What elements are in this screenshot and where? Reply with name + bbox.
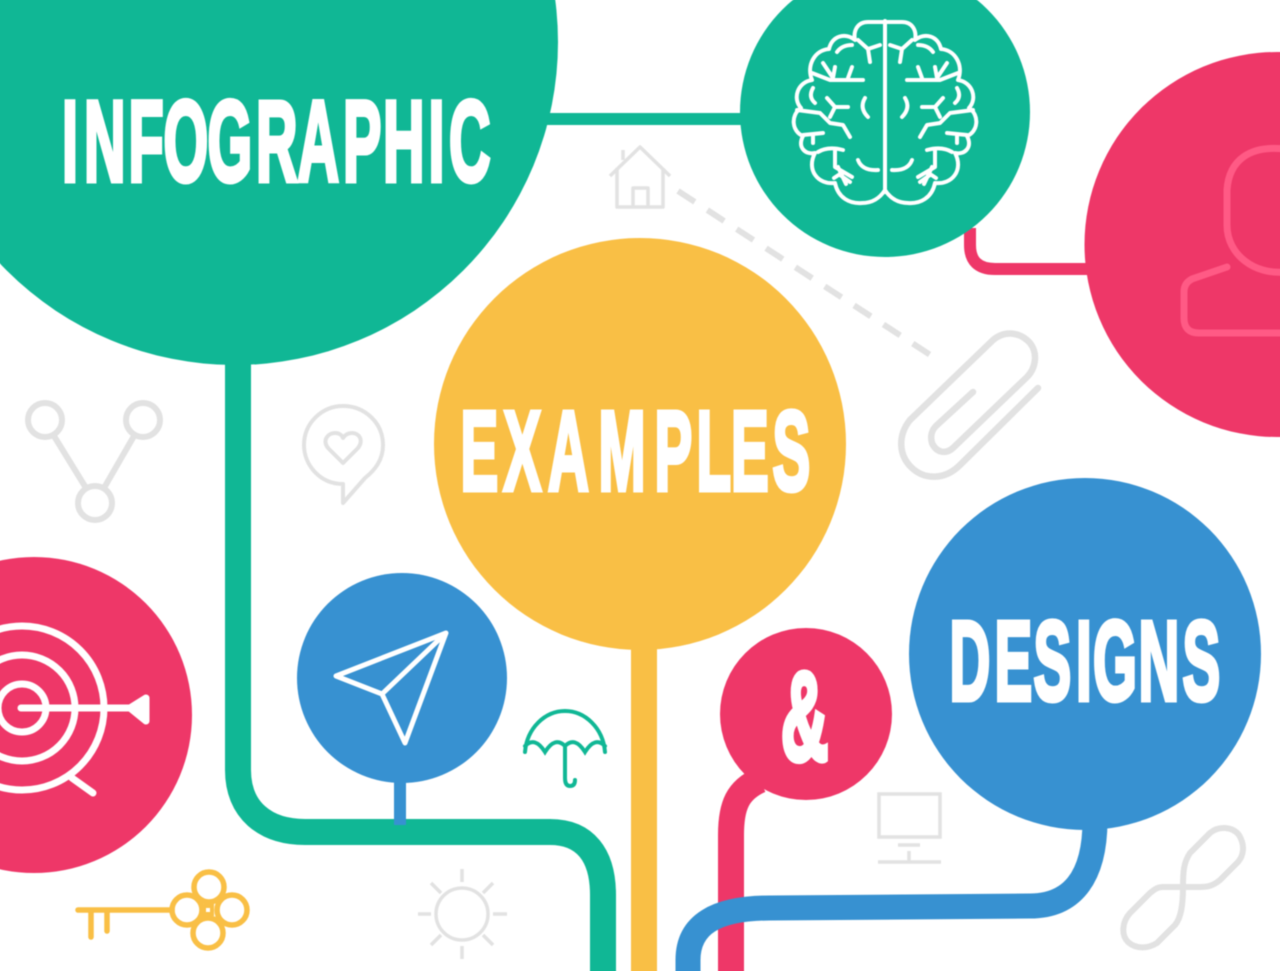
- connector: pink line from ampersand: [731, 780, 760, 971]
- connector: yellow line: [631, 640, 657, 971]
- icon: sun: [418, 869, 507, 959]
- heading: examples: EXAMPLES: [460, 388, 810, 514]
- icon: infinity loop: [1123, 828, 1243, 947]
- icon: computer monitor: [878, 794, 941, 862]
- dashed line: house to paperclip: [678, 191, 935, 358]
- panel: person circle: [1084, 52, 1280, 437]
- connector: blue stem under plane: [394, 775, 406, 825]
- icon: paper plane: [336, 633, 446, 743]
- heading: ampersand: &: [781, 647, 828, 788]
- icon: target with arrow: [0, 626, 146, 793]
- icon: brain: [794, 21, 976, 203]
- heading: infographic: INFOGRAPHIC: [62, 79, 491, 206]
- heading: designs: DESIGNS: [950, 598, 1220, 724]
- panel: designs circle: [909, 478, 1261, 830]
- connector: teal main line: [238, 360, 603, 971]
- panel: brain circle: [740, 0, 1030, 257]
- icon: key: [78, 872, 247, 948]
- panel: ampersand circle: [720, 628, 892, 800]
- panel: target circle: [0, 557, 192, 873]
- connector: pink line from brain to person: [970, 228, 1095, 269]
- panel: examples circle: [434, 238, 846, 650]
- connector: blue line from designs: [688, 820, 1095, 971]
- icon: house: [610, 147, 670, 207]
- icon: umbrella: [525, 711, 605, 786]
- panel: paper plane circle: [297, 573, 507, 783]
- icon: person: [1184, 148, 1280, 333]
- icon: heart speech bubble: [304, 406, 383, 503]
- icon: branch nodes: [28, 403, 160, 520]
- icon: paperclip: [901, 334, 1038, 477]
- connector: teal line to brain: [545, 113, 750, 125]
